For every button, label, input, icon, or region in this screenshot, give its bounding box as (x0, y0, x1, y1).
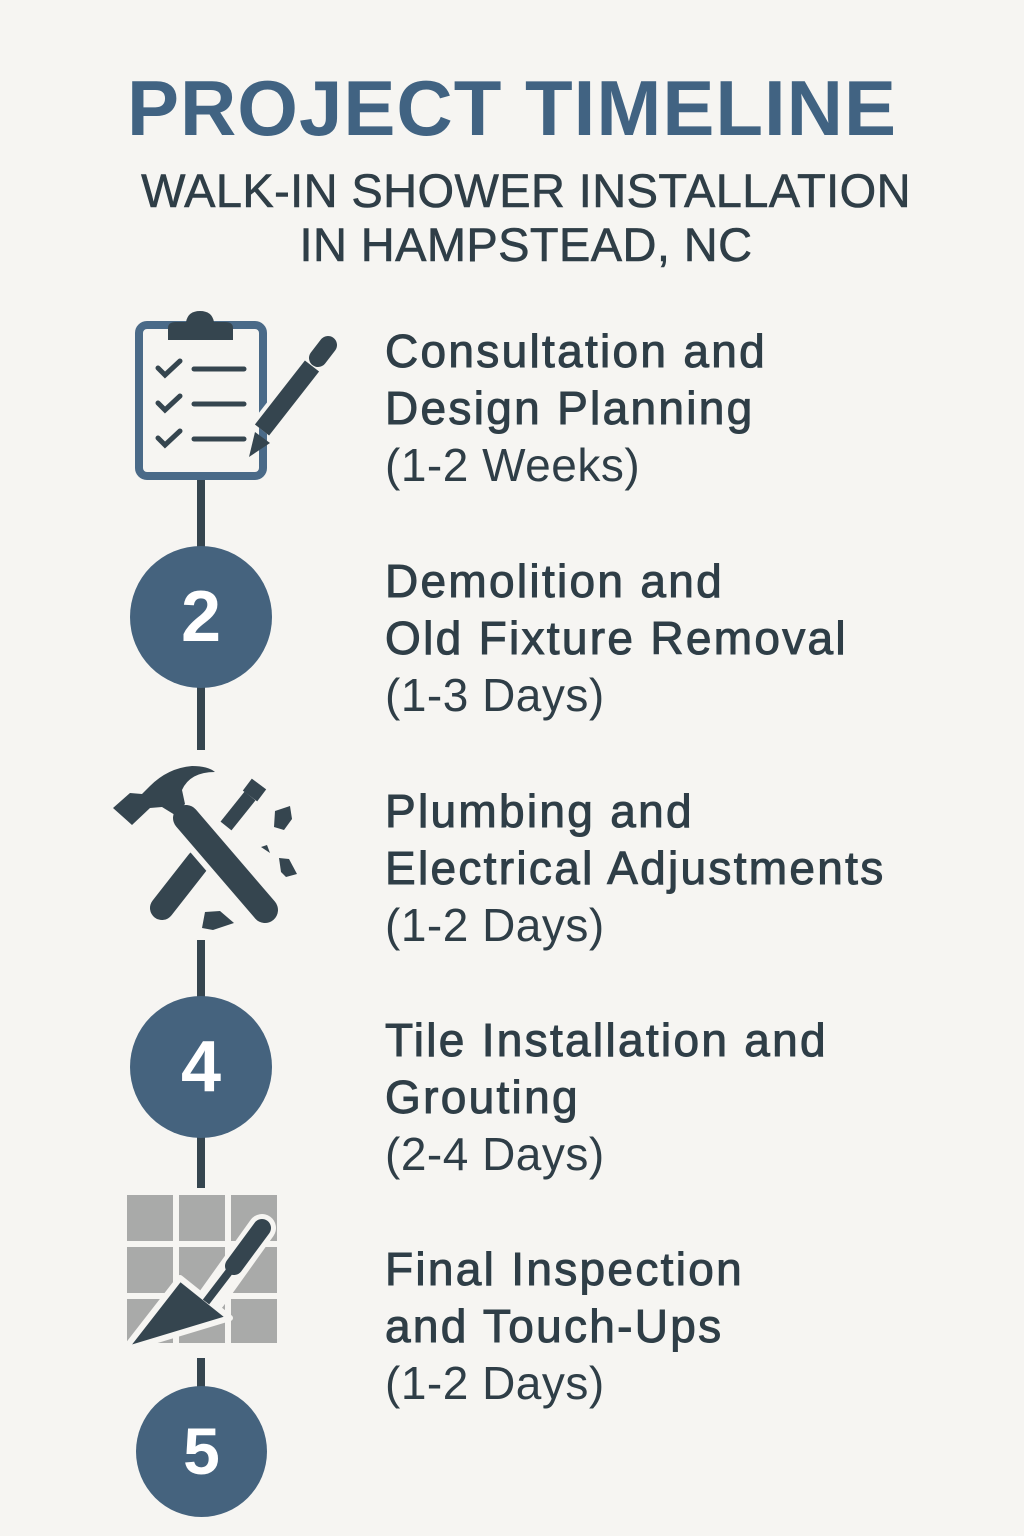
step 1 text: (1-2 Weeks) (385, 439, 640, 491)
icon: clipboard (135, 311, 337, 480)
icon: tiles and trowel (127, 1188, 277, 1358)
timeline line (197, 470, 205, 1400)
circle 2: 2 (181, 577, 221, 657)
step 3 text: Electrical Adjustments (385, 842, 886, 894)
subtitle: WALK-IN SHOWER INSTALLATION (141, 164, 911, 217)
step 2 text: (1-3 Days) (385, 669, 605, 721)
circle 4 (130, 996, 272, 1138)
subtitle (141, 164, 911, 271)
step 4 text: Grouting (385, 1071, 580, 1123)
title: PROJECT TIMELINE (127, 64, 897, 152)
step 5 text (385, 1243, 744, 1409)
step 1 text (385, 325, 767, 491)
step 4 text (385, 1014, 828, 1180)
step 3 text: (1-2 Days) (385, 899, 605, 951)
step 4 text: Tile Installation and (385, 1014, 828, 1066)
step 3 text (385, 785, 886, 951)
step 2 text: Old Fixture Removal (385, 612, 848, 664)
step 2 text (385, 555, 848, 721)
subtitle: IN HAMPSTEAD, NC (300, 218, 752, 271)
circle 5: 5 (183, 1414, 220, 1488)
circle 4: 4 (181, 1027, 221, 1107)
icon: hammer and screwdriver (113, 750, 297, 940)
step 5 text: and Touch-Ups (385, 1300, 723, 1352)
step 1 text: Design Planning (385, 382, 755, 434)
step 4 text: (2-4 Days) (385, 1128, 605, 1180)
step 1 text: Consultation and (385, 325, 767, 377)
step 5 text: (1-2 Days) (385, 1357, 605, 1409)
step 3 text: Plumbing and (385, 785, 694, 837)
circle 2 (130, 546, 272, 688)
circle 5 (136, 1386, 267, 1517)
step 5 text: Final Inspection (385, 1243, 744, 1295)
step 2 text: Demolition and (385, 555, 724, 607)
